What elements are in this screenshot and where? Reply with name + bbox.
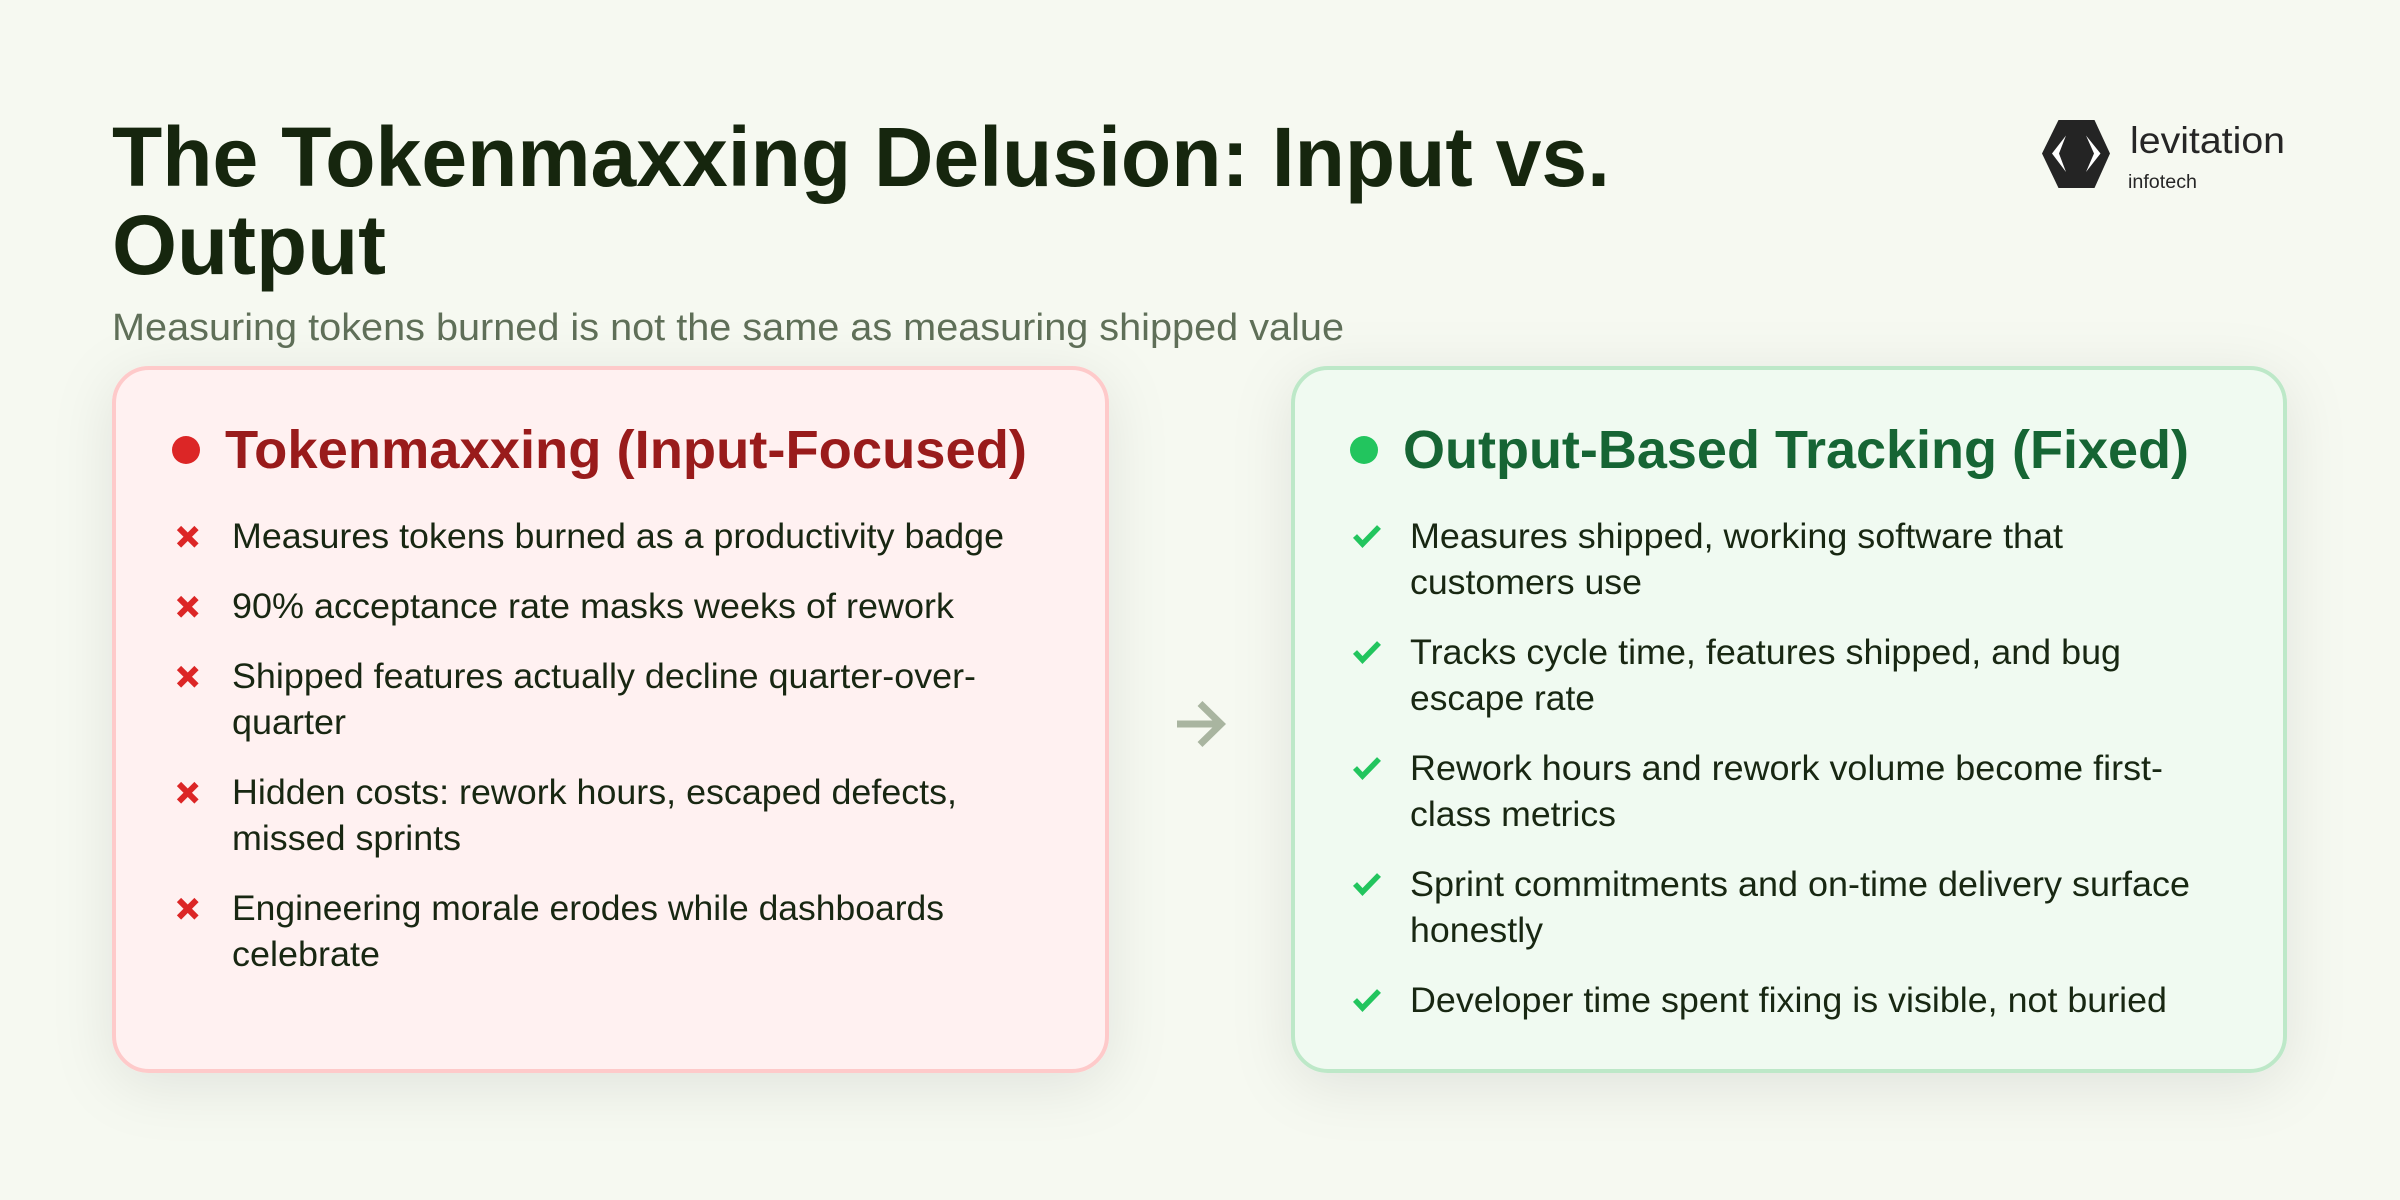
output-based list [1410,516,2190,1020]
input-focused list: Engineering morale erodes while dashboards [232,888,944,928]
panel heading: Output-Based Tracking (Fixed) [1403,420,2189,480]
panel: tokenmaxxing [114,368,1107,1071]
title [112,110,1610,292]
output-based list: Tracks cycle time, features shipped, and bug [1410,632,2121,672]
green status dot [1350,436,1378,464]
input-focused list: celebrate [232,934,380,974]
input-focused list: 90% acceptance rate masks weeks of rework [232,586,954,626]
input-focused list: Shipped features actually decline quarter-over- [232,656,976,696]
input-focused list: missed sprints [232,818,461,858]
panel: output-based tracking [1293,368,2285,1071]
output-based list: honestly [1410,910,1543,950]
panel heading: Tokenmaxxing (Input-Focused) [225,420,1027,480]
logo wordmark: levitation [2130,120,2285,161]
icon: hexagon logo mark [2042,120,2110,188]
output-based list: Measures shipped, working software that [1410,516,2063,556]
logo subtext: infotech [2128,172,2197,193]
title: Output [112,198,386,292]
red x icons [179,528,196,918]
output-based list: Developer time spent fixing is visible, not buried [1410,980,2167,1020]
output-based list: Rework hours and rework volume become first- [1410,748,2163,788]
green check icons [1355,527,1379,1008]
output-based list: class metrics [1410,794,1616,834]
red status dot [172,436,200,464]
input-focused list: Hidden costs: rework hours, escaped defects, [232,772,957,812]
output-based list: Sprint commitments and on-time delivery surface [1410,864,2190,904]
input-focused list: quarter [232,702,346,742]
arrow [1177,704,1221,744]
output-based list: escape rate [1410,678,1595,718]
output-based list: customers use [1410,562,1642,602]
title: The Tokenmaxxing Delusion: Input vs. [112,110,1610,204]
input-focused list: Measures tokens burned as a productivity badge [232,516,1004,556]
subtitle: Measuring tokens burned is not the same as measuring shipped value [112,307,1344,349]
input-focused list [232,516,1004,974]
logo: levitation infotech [2042,120,2285,193]
